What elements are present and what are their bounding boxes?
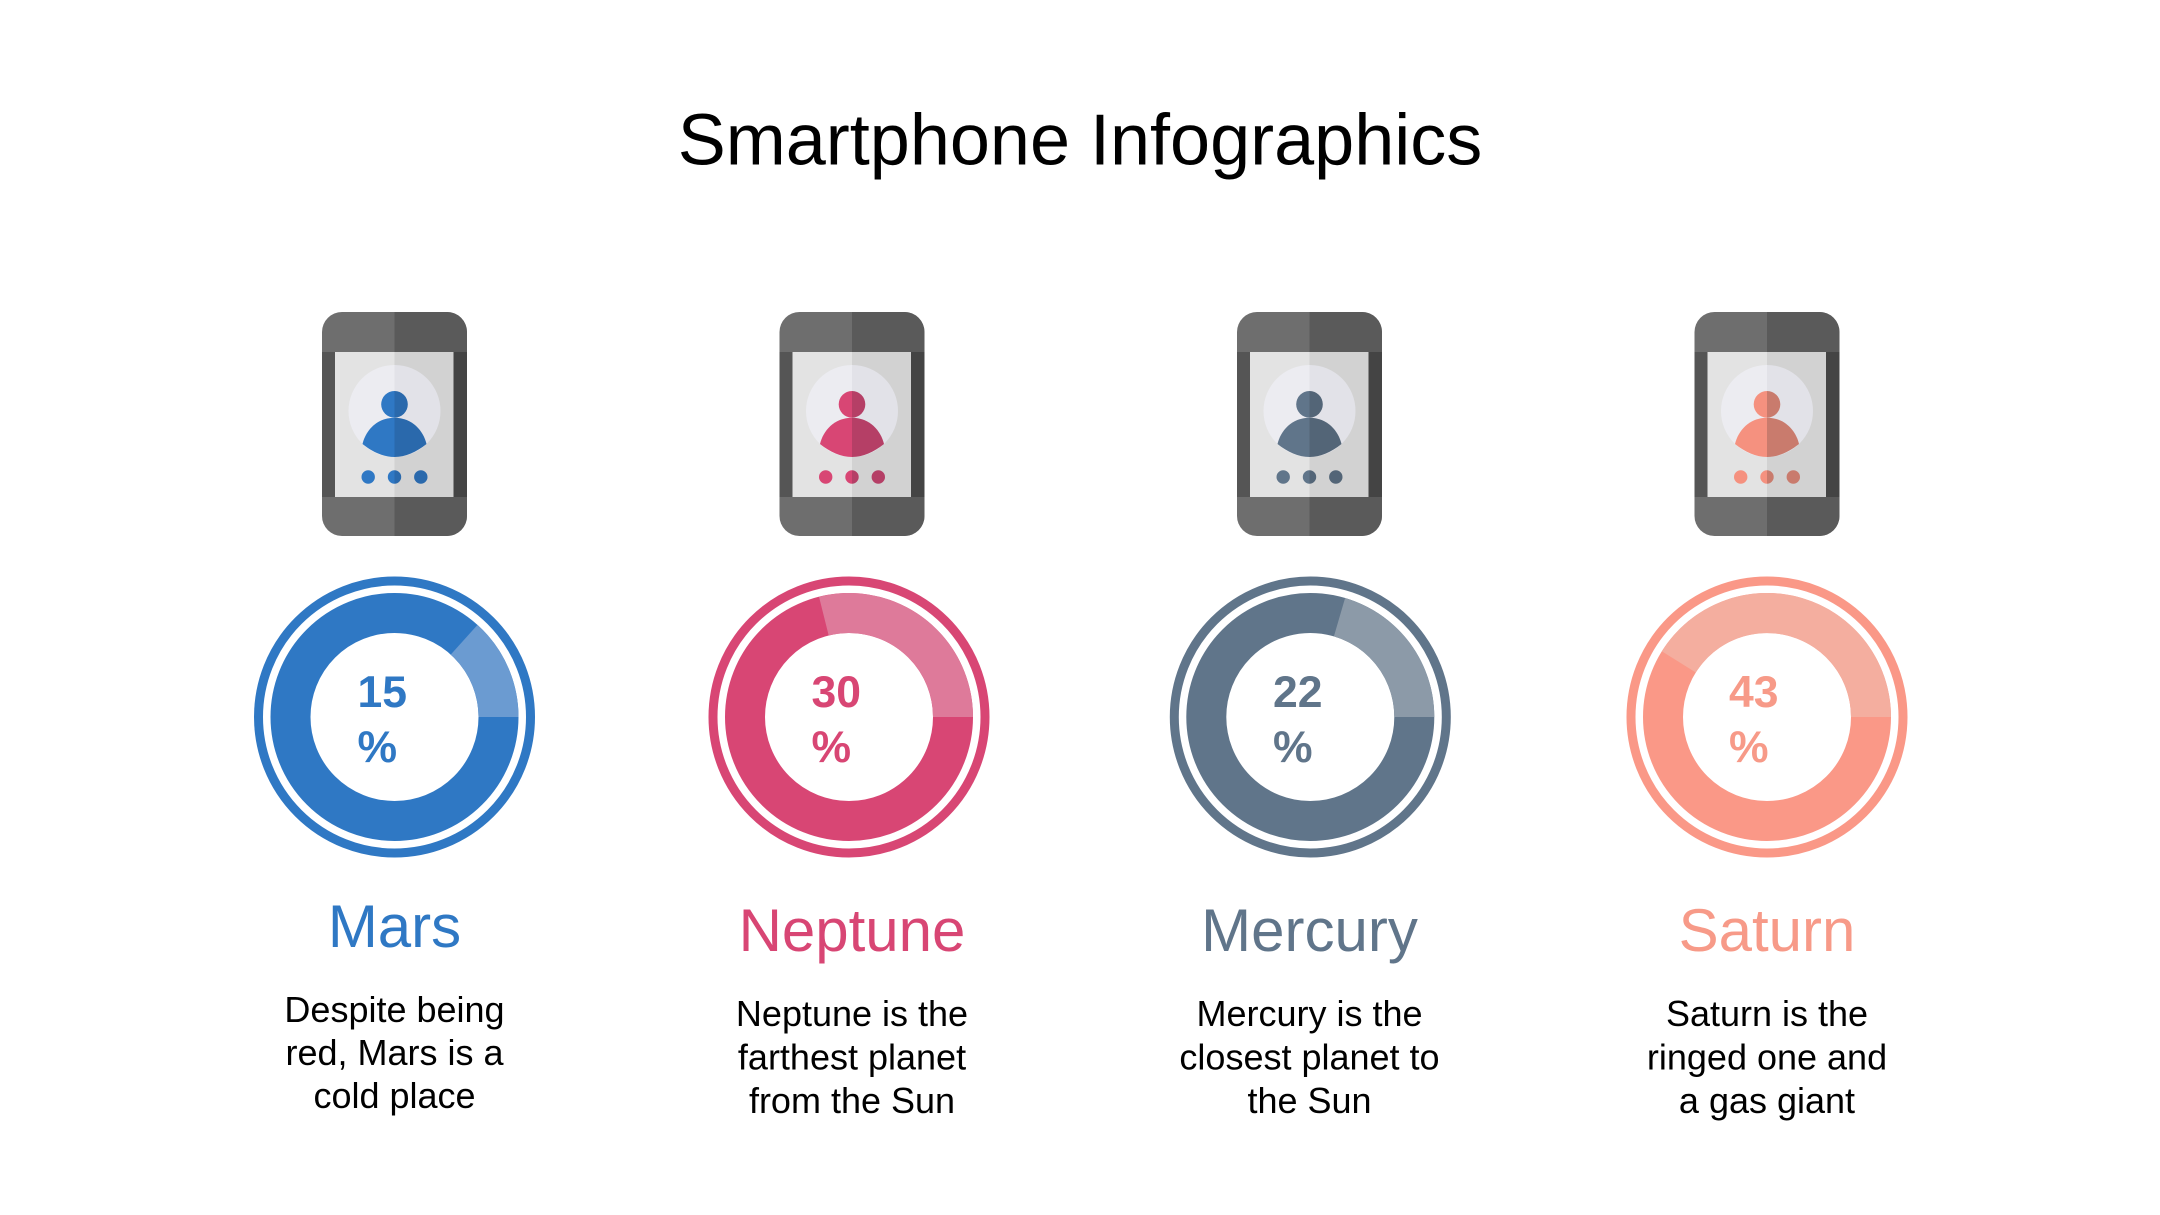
value: 15%: 15	[358, 668, 407, 717]
value: 22%	[1273, 668, 1322, 772]
panel: Mercury	[1174, 312, 1446, 1121]
description: Saturn: Saturn is the	[1666, 993, 1868, 1034]
value: 43%: %	[1729, 723, 1769, 772]
panel: Saturn	[1631, 312, 1903, 1121]
value: 30%: %	[812, 723, 851, 772]
panel: Neptune	[713, 312, 985, 1121]
description: Neptune: Neptune is the	[736, 993, 968, 1034]
title: Smartphone Infographics	[678, 100, 1482, 180]
value: 43%: 43	[1729, 668, 1778, 717]
description: Mercury: closest planet to	[1179, 1036, 1440, 1078]
icon: smartphone Mars	[322, 312, 467, 536]
description: Mercury	[1179, 993, 1440, 1121]
description: Saturn	[1647, 993, 1887, 1121]
panel: Mars	[258, 312, 530, 1116]
donut chart: Mercury 22%	[1174, 581, 1446, 853]
value: 22%: 22	[1273, 668, 1322, 717]
icon: smartphone Neptune	[780, 312, 924, 536]
name: Mercury: Mercury	[1201, 897, 1418, 964]
description: Neptune	[736, 993, 968, 1121]
value: 22%: %	[1273, 723, 1313, 772]
description: Mercury: the Sun	[1247, 1080, 1372, 1121]
name: Neptune: Neptune	[739, 897, 965, 964]
name: Mars: Mars	[328, 893, 461, 960]
icon: smartphone Mercury	[1237, 312, 1382, 536]
donut chart: Neptune 30%	[713, 581, 985, 853]
description: Mars: Despite being	[284, 989, 505, 1030]
icon: smartphone Saturn	[1694, 312, 1840, 536]
description: Saturn: ringed one and	[1647, 1036, 1887, 1078]
description: Mars	[284, 989, 505, 1116]
value: 30%	[812, 668, 861, 772]
description: Mars: cold place	[313, 1075, 476, 1116]
value: 15%	[358, 668, 407, 772]
description: Saturn: a gas giant	[1679, 1080, 1855, 1121]
description: Neptune: from the Sun	[749, 1080, 955, 1121]
value: 15%: %	[358, 723, 397, 772]
value: 43%	[1729, 668, 1778, 772]
description: Mars: red, Mars is a	[285, 1032, 505, 1073]
value: 30%: 30	[812, 668, 861, 717]
donut chart: Saturn 43%	[1631, 581, 1903, 853]
description: Neptune: farthest planet	[738, 1036, 966, 1078]
description: Mercury: Mercury is the	[1196, 993, 1423, 1034]
name: Saturn: Saturn	[1679, 897, 1855, 964]
donut chart: Mars 15%	[258, 581, 530, 853]
